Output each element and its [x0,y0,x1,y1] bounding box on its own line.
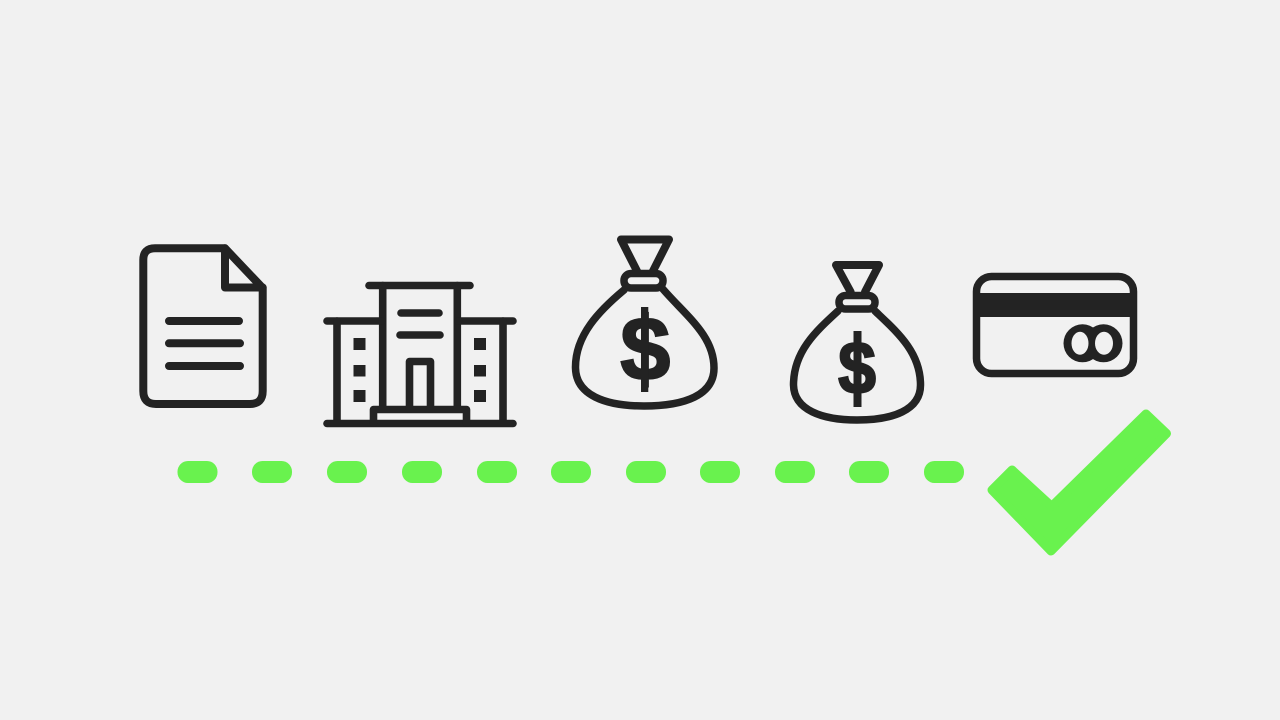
icon: document [143,248,263,404]
dashed progress line [178,461,964,483]
icon: small money bag: $ [838,328,876,410]
icon: green check mark [992,414,1166,551]
icon: large money bag: $ [620,300,670,400]
icon: small money bag [794,265,920,420]
icon: large money bag [575,240,714,406]
icon: bank building [327,286,513,424]
icon: credit card [976,276,1134,374]
